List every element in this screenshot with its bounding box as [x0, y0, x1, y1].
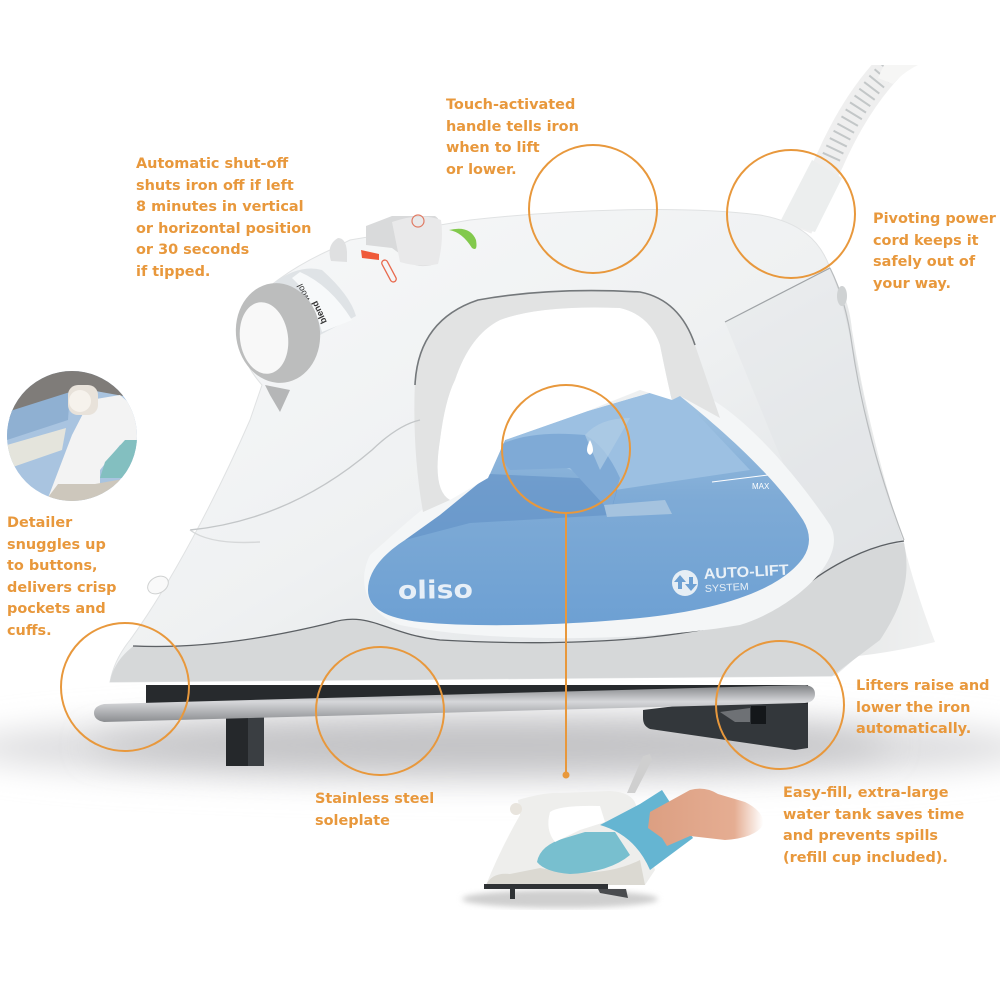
iron rear skirt — [740, 278, 935, 676]
circle: pivoting cord — [727, 150, 855, 278]
text: detailer: to buttons, — [7, 558, 98, 574]
power cord — [780, 52, 918, 232]
auto-lift badge: SYSTEM — [705, 582, 749, 595]
white collar around tank — [364, 390, 834, 638]
temperature dial: blend — [310, 299, 329, 325]
circle: soleplate — [316, 647, 444, 775]
text: pivoting power cord: safely out of — [873, 254, 976, 270]
text: easy-fill tank: water tank saves time — [783, 807, 965, 823]
text: touch-activated handle: when to lift — [446, 140, 540, 156]
circle: touch handle — [529, 145, 657, 273]
text: detailer: Detailer — [7, 515, 73, 531]
text: automatic shut-off: or horizontal position — [136, 221, 311, 237]
grey lower band — [110, 543, 907, 682]
iron body shell — [110, 210, 904, 682]
floor shadow — [0, 714, 1000, 782]
circle: detailer tip — [61, 623, 189, 751]
text: automatic shut-off: or 30 seconds — [136, 242, 249, 258]
text: detailer: snuggles up — [7, 537, 106, 553]
steam button and selector — [330, 215, 476, 283]
soleplate dark — [146, 685, 808, 704]
text: easy-fill tank: (refill cup included). — [783, 850, 948, 866]
connector line to refill inset — [562, 513, 570, 778]
handle inner rim — [414, 290, 720, 512]
temperature dial: wool — [295, 282, 312, 304]
handle opening — [438, 308, 672, 500]
text: touch-activated handle: handle tells iron — [446, 119, 579, 135]
text: detailer: delivers crisp — [7, 580, 117, 596]
text: easy-fill tank: Easy-fill, extra-large — [783, 785, 949, 801]
soleplate button — [144, 573, 172, 597]
front foot — [226, 715, 264, 766]
max line — [712, 475, 770, 491]
seams — [190, 420, 420, 530]
text: lifters: lower the iron — [856, 700, 970, 716]
text: lifters: automatically. — [856, 721, 971, 737]
temperature dial — [229, 268, 356, 412]
circle: water tank — [502, 385, 630, 513]
detailer photo inset — [7, 371, 137, 501]
tank lid — [500, 434, 620, 514]
text: automatic shut-off: Automatic shut-off — [136, 156, 288, 172]
text: pivoting power cord: Pivoting power — [873, 211, 997, 227]
iron main illustration — [94, 52, 935, 766]
text: pivoting power cord: your way. — [873, 276, 951, 292]
rear lifter block — [643, 690, 808, 750]
refill cup inset illustration — [462, 754, 763, 908]
icon: water drop — [587, 440, 593, 455]
auto-lift badge: AUTO-LIFT — [703, 562, 789, 583]
text: touch-activated handle: Touch-activated — [446, 97, 575, 113]
tank blue panel — [368, 390, 809, 625]
oliso logo: oliso — [398, 575, 473, 605]
text: automatic shut-off: shuts iron off if left — [136, 178, 294, 194]
stainless rail — [94, 685, 815, 722]
text: stainless soleplate: soleplate — [315, 813, 390, 829]
rear body shading — [725, 268, 904, 580]
text: automatic shut-off: if tipped. — [136, 264, 210, 280]
text: easy-fill tank: and prevents spills — [783, 828, 938, 844]
text: detailer: cuffs. — [7, 623, 52, 639]
circle: lifters — [716, 641, 844, 769]
text: stainless soleplate: Stainless steel — [315, 791, 434, 807]
text: pivoting power cord: cord keeps it — [873, 233, 979, 249]
text: automatic shut-off: 8 minutes in vertical — [136, 199, 304, 215]
text: detailer: pockets and — [7, 601, 106, 617]
auto-lift badge — [672, 562, 789, 596]
max line: MAX — [752, 482, 770, 491]
callout circles — [61, 145, 855, 775]
text: lifters: Lifters raise and — [856, 678, 989, 694]
text: touch-activated handle: or lower. — [446, 162, 517, 178]
rear body button — [837, 286, 847, 306]
